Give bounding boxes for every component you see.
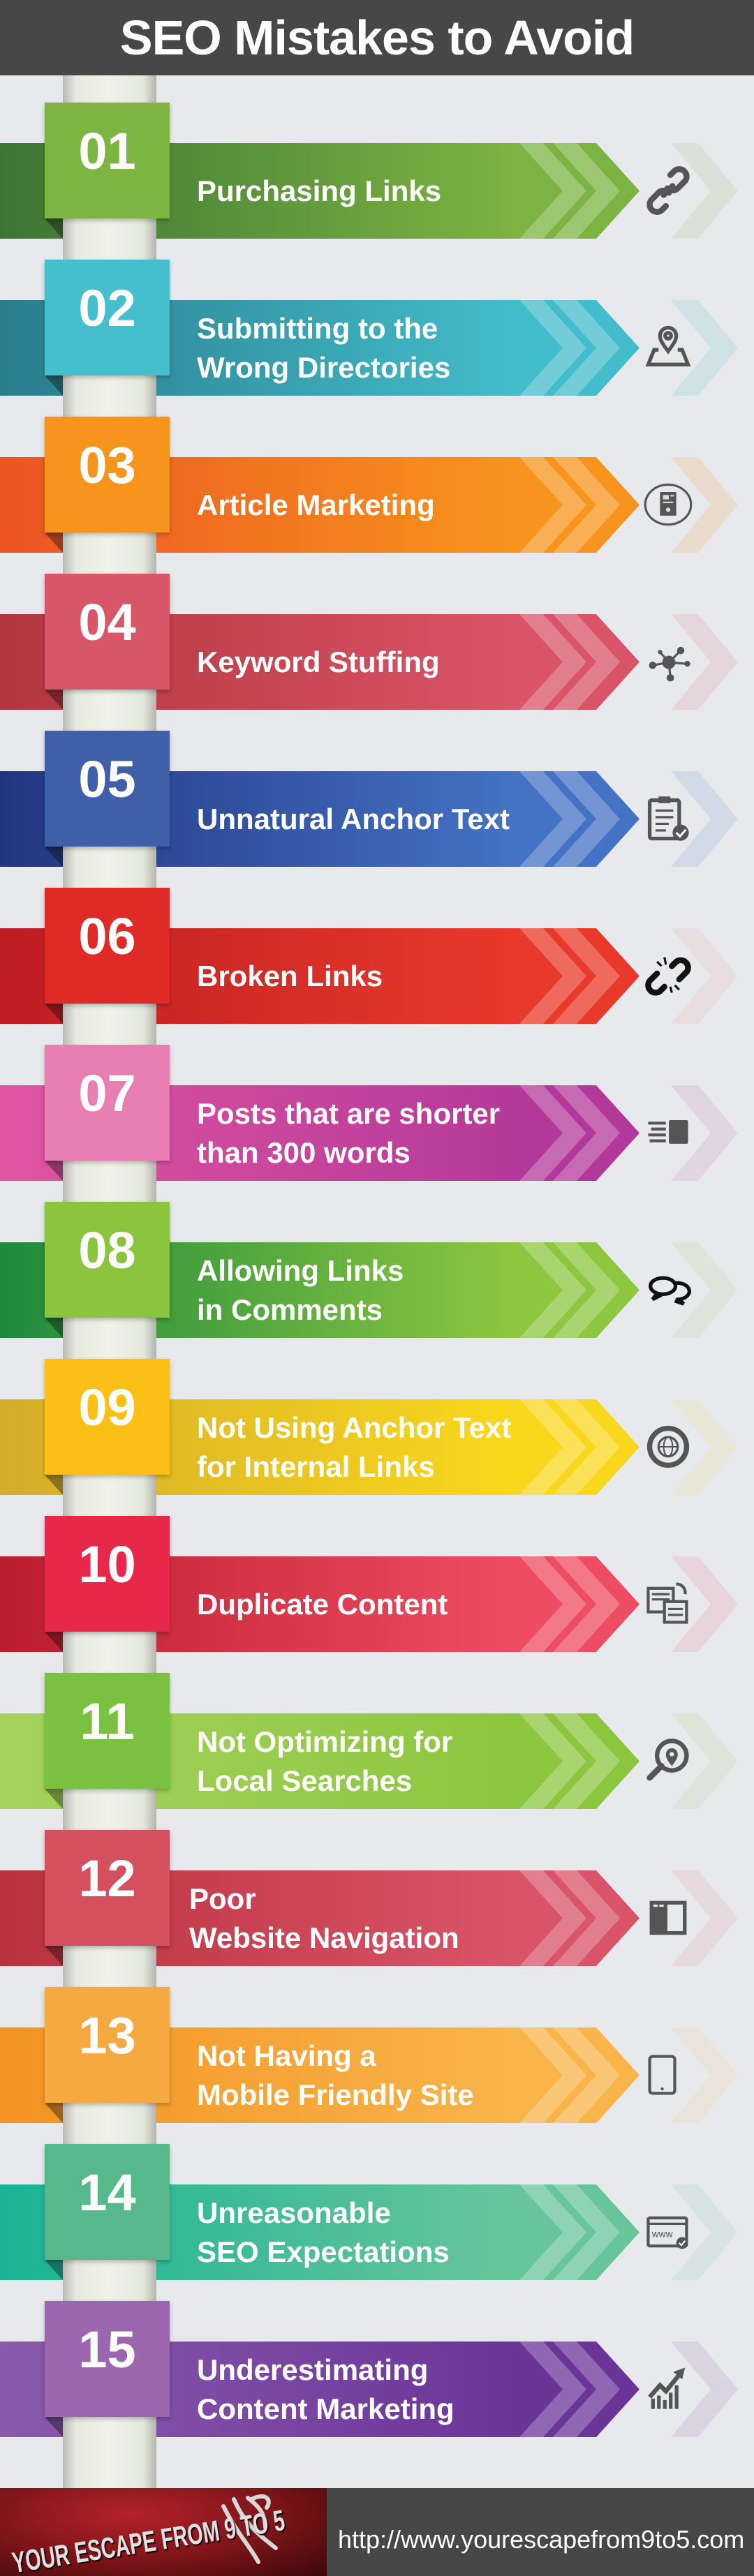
number box 06 xyxy=(45,888,170,1004)
icon: speech bubbles xyxy=(649,1276,691,1306)
number box 13: 13 xyxy=(78,2007,136,2064)
header xyxy=(0,0,754,75)
row 08 xyxy=(0,1202,738,1338)
label 08: Allowing Links xyxy=(197,1253,404,1287)
label 09: for Internal Links xyxy=(197,1450,435,1482)
number box 05 xyxy=(45,731,170,847)
row 09 xyxy=(0,1358,738,1495)
label 09: Not Using Anchor Text xyxy=(197,1411,511,1443)
number box 13 xyxy=(45,1987,170,2103)
label 07: Posts that are shorter xyxy=(197,1097,500,1129)
number box 04 xyxy=(45,574,170,690)
label 11: Local Searches xyxy=(197,1764,412,1796)
row 06 xyxy=(0,888,737,1024)
label 02: Submitting to the xyxy=(197,311,438,345)
label 15 xyxy=(197,2353,454,2425)
row 03 xyxy=(0,416,738,553)
icon: broken link xyxy=(645,957,691,995)
label 08 xyxy=(197,1253,404,1326)
row 15 xyxy=(0,2300,738,2437)
label 10: Duplicate Content xyxy=(197,1587,448,1621)
label 14 xyxy=(197,2196,450,2268)
label 13: Mobile Friendly Site xyxy=(197,2078,474,2110)
icon: www browser: www xyxy=(651,2228,673,2239)
label 12: Website Navigation xyxy=(189,1921,459,1954)
number box 01: 01 xyxy=(78,122,136,180)
row 07 xyxy=(0,1044,738,1181)
number box 02: 02 xyxy=(78,279,136,337)
icon: article circle xyxy=(644,483,693,526)
label 15: Content Marketing xyxy=(197,2392,454,2425)
icon: network xyxy=(649,646,690,681)
row 04 xyxy=(0,574,738,710)
footer url: http://www.yourescapefrom9to5.com xyxy=(338,2525,744,2554)
row 10 xyxy=(0,1516,738,1652)
number box 14: 14 xyxy=(78,2164,136,2221)
footer logo panel xyxy=(0,2488,327,2576)
number box 02 xyxy=(45,260,170,375)
label 11: Not Optimizing for xyxy=(197,1725,452,1757)
row 11 xyxy=(0,1672,738,1809)
label 15: Underestimating xyxy=(197,2353,428,2385)
number box 15 xyxy=(45,2301,170,2417)
number box 04: 04 xyxy=(78,593,136,651)
icon: chain link xyxy=(646,166,690,215)
logo swirl xyxy=(221,2494,278,2564)
icon: magnifier pin xyxy=(646,1739,689,1781)
number box 11 xyxy=(45,1673,170,1789)
number box 05: 05 xyxy=(78,750,136,808)
label 12 xyxy=(189,1882,459,1954)
label 13 xyxy=(197,2039,474,2110)
number box 15: 15 xyxy=(78,2321,136,2378)
row 02 xyxy=(0,260,738,396)
number box 10 xyxy=(45,1516,170,1632)
label 14: Unreasonable xyxy=(197,2196,391,2229)
number box 12 xyxy=(45,1830,170,1946)
label 05: Unnatural Anchor Text xyxy=(197,803,510,835)
label 12: Poor xyxy=(189,1882,256,1915)
icon: short text lines xyxy=(648,1120,688,1144)
label 09 xyxy=(197,1411,511,1482)
icon: growth chart xyxy=(648,2367,686,2409)
label 13: Not Having a xyxy=(197,2039,376,2071)
icon: globe ring xyxy=(646,1425,690,1468)
label 02: Wrong Directories xyxy=(197,350,450,384)
number box 14 xyxy=(45,2144,170,2260)
icon: map pin xyxy=(645,325,691,366)
label 06: Broken Links xyxy=(197,959,383,992)
number box 07 xyxy=(45,1045,170,1161)
row 13 xyxy=(0,1986,738,2123)
label 03: Article Marketing xyxy=(197,489,435,521)
number box 11: 11 xyxy=(80,1692,135,1750)
number box 08: 08 xyxy=(78,1221,136,1279)
number box 03 xyxy=(45,417,170,533)
icon: clipboard check xyxy=(648,796,689,841)
number box 03: 03 xyxy=(78,436,136,494)
label 04: Keyword Stuffing xyxy=(197,645,440,678)
label 11 xyxy=(197,1725,452,1796)
row 01 xyxy=(0,102,738,239)
label 02 xyxy=(197,311,450,384)
row 05 xyxy=(0,730,738,867)
number box 10: 10 xyxy=(78,1535,136,1593)
icon: tablet xyxy=(648,2055,677,2095)
row 12 xyxy=(0,1830,738,1966)
number box 01 xyxy=(45,103,170,218)
number box 06: 06 xyxy=(78,907,136,965)
footer xyxy=(0,2488,754,2576)
header: SEO Mistakes to Avoid xyxy=(120,10,634,65)
icon: duplicate docs xyxy=(646,1582,688,1624)
row 14 xyxy=(0,2144,738,2280)
label 07 xyxy=(197,1097,500,1168)
label 07: than 300 words xyxy=(197,1136,411,1168)
label 01: Purchasing Links xyxy=(197,174,441,207)
number box 08 xyxy=(45,1202,170,1318)
number box 07: 07 xyxy=(78,1064,136,1122)
label 08: in Comments xyxy=(197,1293,383,1326)
icon: site layout xyxy=(649,1901,687,1935)
pillar xyxy=(63,75,156,2488)
number box 09 xyxy=(45,1359,170,1475)
icon: www browser xyxy=(646,2217,688,2249)
number box 12: 12 xyxy=(78,1849,136,1907)
label 14: SEO Expectations xyxy=(197,2235,450,2268)
number box 09: 09 xyxy=(78,1378,136,1436)
